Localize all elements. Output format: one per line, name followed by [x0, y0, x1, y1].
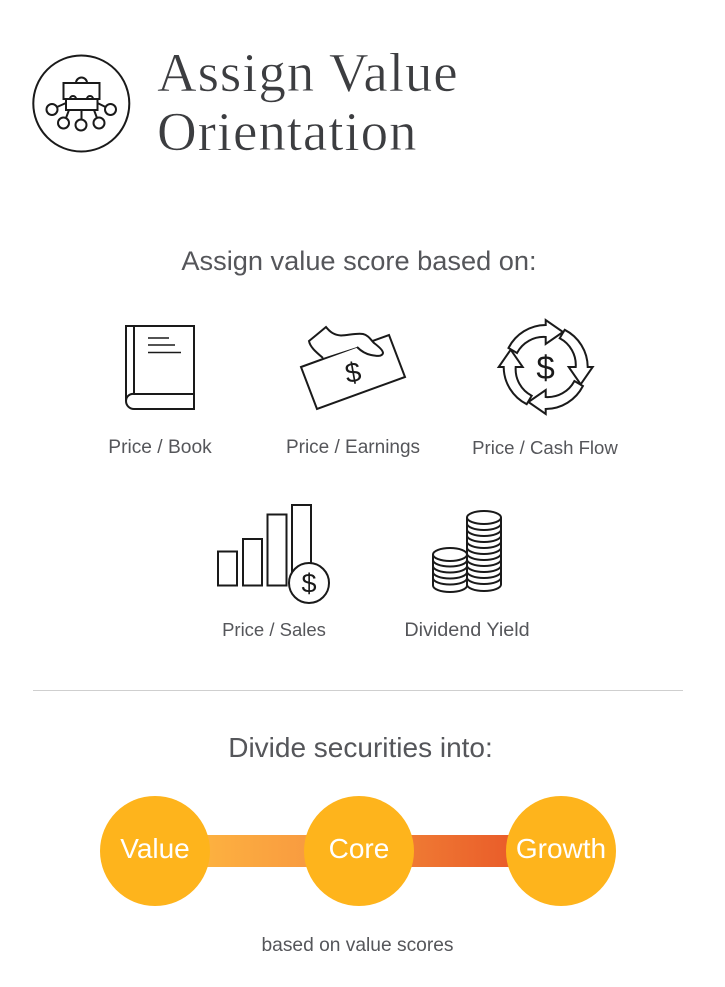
heading: divide securities: Divide securities into:: [228, 732, 493, 763]
label: price / cash flow: Price / Cash Flow: [472, 437, 618, 458]
icon: book: [125, 325, 195, 410]
icon: bars with dollar coin: $: [301, 568, 317, 598]
label: price / book: Price / Book: [108, 437, 212, 458]
caption: based on value scores: [262, 935, 454, 956]
icon: hand and banknote: $: [343, 356, 364, 389]
node: core: [304, 796, 414, 906]
icon: bars with dollar coin: [217, 504, 330, 604]
value scale: [100, 796, 616, 906]
node: core: Core: [329, 833, 389, 864]
title: [157, 42, 459, 162]
gradient bar: [200, 835, 520, 867]
label: price / earnings: Price / Earnings: [286, 437, 420, 458]
icon: circular cash flow arrows: [496, 318, 594, 416]
divider: [33, 690, 683, 691]
icon: hand and banknote: [300, 326, 406, 410]
icon: coin stacks: [432, 510, 502, 593]
icon: briefcase network: [32, 54, 130, 152]
node: value: Value: [120, 833, 190, 864]
title: Assign Value: [157, 42, 459, 103]
node: value: [100, 796, 210, 906]
label: dividend yield: Dividend Yield: [404, 619, 530, 641]
heading: assign value score: Assign value score based on:: [181, 245, 537, 276]
label: price / sales: Price / Sales: [222, 619, 326, 640]
node: growth: Growth: [516, 833, 606, 864]
title: Orientation: [157, 101, 417, 162]
node: growth: [506, 796, 616, 906]
icon: circular cash flow arrows: $: [536, 349, 555, 386]
